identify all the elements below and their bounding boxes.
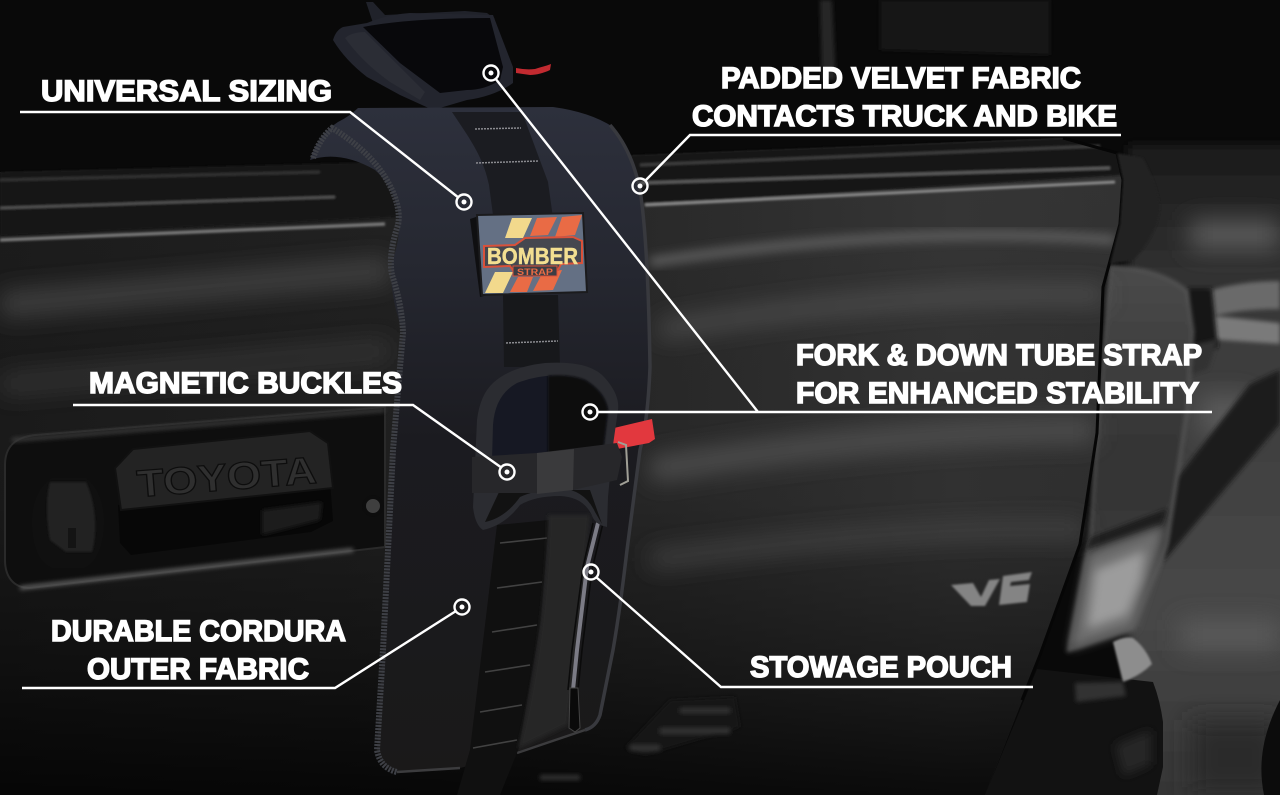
upper strap loop [333,2,551,110]
lock barrel [32,478,104,568]
label: universal sizing [20,75,472,210]
label: durable cordura outer fabric: OUTER FABRIC [87,653,309,686]
bumper [985,638,1163,795]
zipper pouch [568,523,603,732]
bicycle frame behind truck [1163,281,1280,562]
tailgate body [0,138,1160,795]
lower strap cradle [473,363,618,530]
tail light [1068,266,1193,651]
label: magnetic buckles [73,367,514,480]
tailgate reflections [0,235,1115,560]
label: universal sizing: UNIVERSAL SIZING [41,75,332,108]
tailgate seam [1022,138,1123,700]
label: stowage pouch [584,564,1033,687]
lower tailgate embossed logo [540,697,740,780]
piping left edge [313,128,403,772]
label: padded velvet fabric: CONTACTS TRUCK AND BIKE [692,100,1117,133]
label: fork and down tube strap [484,66,1212,420]
magnetic buckle webbing [472,442,628,494]
piping right edge [585,125,650,730]
label: fork and down tube strap: FOR ENHANCED STABILITY [796,377,1199,410]
taillight upper cap [1110,153,1160,264]
centre webbing upper [452,112,553,218]
pouch panel [518,515,590,749]
handle recess with Toyota emblem [5,407,385,588]
label: durable cordura outer fabric [22,600,470,688]
label: magnetic buckles: MAGNETIC BUCKLES [89,367,402,400]
lower webbing and molle [457,520,549,795]
Bomber Strap patch: STRAP [517,267,554,278]
Toyota handle badge: TOYOTA [135,450,318,506]
label: durable cordura outer fabric: DURABLE CORDURA [51,615,346,648]
velcro pull tab [613,419,655,449]
Bomber Strap patch: BOMBER [487,243,578,269]
handle recess [118,481,333,555]
centre webbing lower [503,295,560,367]
label: padded velvet fabric [632,62,1121,194]
tailgate top ledge [0,138,1122,240]
label: fork and down tube strap: FORK & DOWN TUBE STRAP [796,339,1202,372]
Toyota handle badge [115,431,333,510]
label: stowage pouch: STOWAGE POUCH [750,651,1012,684]
strap main body [310,107,650,795]
Bomber Strap patch [470,213,587,297]
label: padded velvet fabric: PADDED VELVET FABRIC [721,62,1081,95]
bottom edge [397,730,585,772]
V6 emblem [951,572,1032,606]
